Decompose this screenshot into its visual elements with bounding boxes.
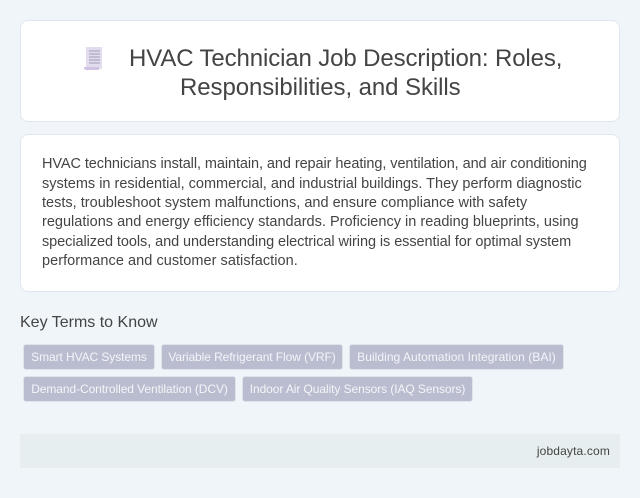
description text: HVAC technicians install, maintain, and repair heating, ventilation, and air conditioning bbox=[42, 156, 587, 172]
tag: dcv bbox=[23, 376, 236, 402]
tag: bai: Building Automation Integration (BAI) bbox=[357, 350, 556, 364]
footer source: jobdayta.com bbox=[537, 444, 610, 458]
tag: dcv: Demand-Controlled Ventilation (DCV) bbox=[31, 382, 228, 396]
heading: key terms: Key Terms to Know bbox=[20, 314, 158, 331]
footer bar bbox=[20, 434, 620, 468]
tag: vrf: Variable Refrigerant Flow (VRF) bbox=[168, 350, 336, 364]
panel: title card bbox=[20, 20, 620, 122]
description text: tests, troubleshoot system malfunctions, and ensure compliance with safety bbox=[42, 195, 527, 211]
tag: iaq: Indoor Air Quality Sensors (IAQ Sensors) bbox=[250, 382, 465, 396]
icon: paper scroll bbox=[84, 47, 102, 70]
tag: smart hvac: Smart HVAC Systems bbox=[31, 350, 147, 364]
description text: regulations and energy efficiency standards. Proficiency in reading blueprints, using bbox=[42, 214, 579, 230]
title line 2: Responsibilities, and Skills bbox=[180, 74, 461, 101]
tag: smart hvac bbox=[23, 344, 155, 370]
panel: description card bbox=[20, 134, 620, 292]
tag: iaq bbox=[242, 376, 473, 402]
tag: vrf bbox=[161, 344, 343, 370]
title line 1: HVAC Technician Job Description: Roles, bbox=[129, 45, 562, 72]
description text: performance and customer satisfaction. bbox=[42, 253, 298, 269]
tag list bbox=[23, 344, 564, 402]
tag: bai bbox=[349, 344, 564, 370]
description text: specialized tools, and understanding electrical wiring is essential for optimal system bbox=[42, 234, 571, 250]
description text: systems in residential, commercial, and industrial buildings. They perform diagnostic bbox=[42, 176, 582, 192]
